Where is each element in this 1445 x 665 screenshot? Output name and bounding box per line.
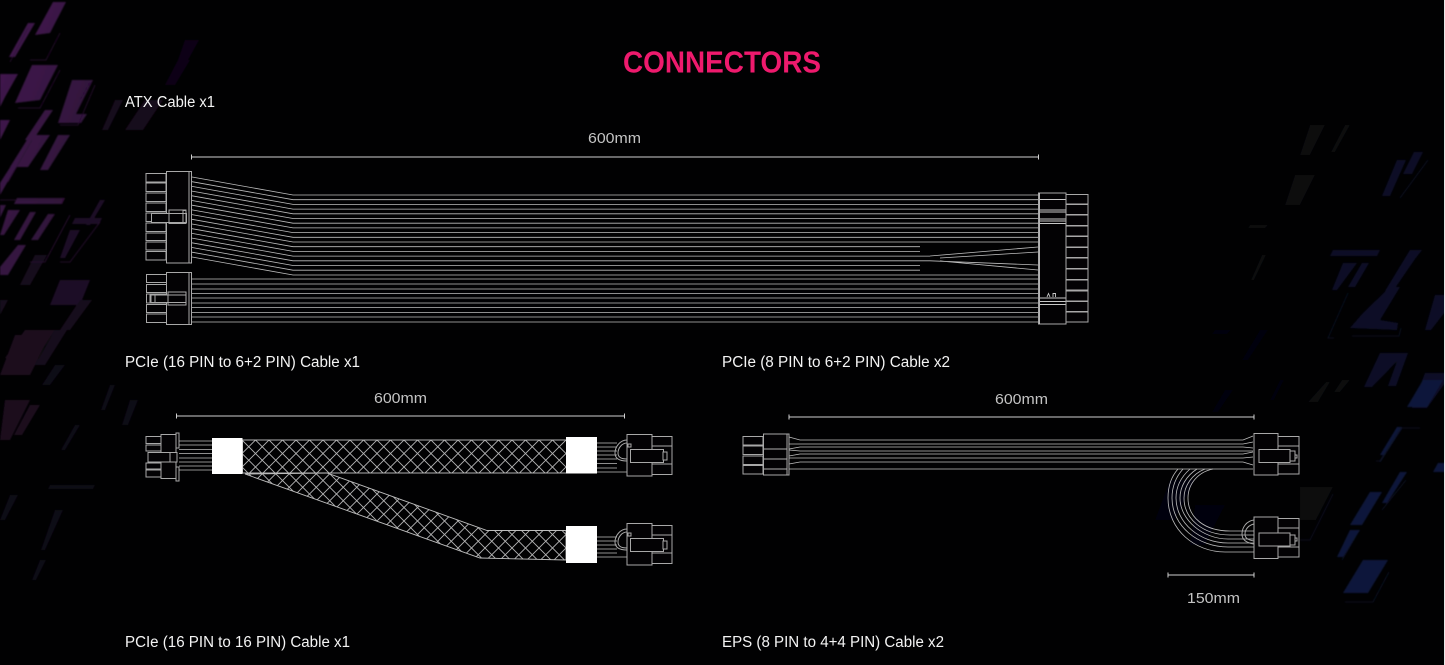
dimension: PCIe 600mm: 600mm (374, 391, 427, 407)
connector: EPS 8 pin left (743, 434, 789, 475)
dimension: PCIe 600mm (176, 391, 624, 418)
title: CONNECTORS (623, 44, 821, 80)
connector: EPS 8 pin upper right (1254, 434, 1299, 475)
sleeve cap: upper right (566, 437, 597, 474)
wires: left (179, 441, 212, 470)
connector: ATX 8 pin left (146, 272, 192, 324)
heading: PCIe 16 to 16 label: PCIe (16 PIN to 16 PIN) Cable x1 (125, 634, 350, 651)
ATX upper wires (192, 177, 1038, 275)
connector: 6+2 pin upper right (615, 434, 672, 476)
ATX lower wires (191, 279, 1038, 322)
dimension: 150mm (1168, 572, 1254, 607)
ATX cable diagram (146, 131, 1088, 324)
connector: 4+4 pin lower right (1242, 517, 1299, 558)
dimension: ATX 600mm: 600mm (588, 131, 641, 147)
dimension: EPS 600mm: 600mm (995, 392, 1048, 408)
wires: EPS curved branch (1168, 469, 1254, 552)
wires: EPS main (789, 436, 1253, 469)
heading: PCIe 16 to 6+2 label: PCIe (16 PIN to 6+2 PIN) Cable x1 (125, 354, 360, 371)
dimension: EPS 600mm (789, 392, 1254, 420)
lower braided sleeve (245, 473, 566, 560)
connector: ATX 24 pin right (1038, 193, 1088, 324)
wires: upper right (597, 443, 627, 472)
upper braided sleeve (242, 440, 566, 473)
connector: 16 pin left (146, 433, 179, 481)
PCIe braided Y cable diagram (146, 391, 672, 565)
decoration: blue streaks right (1155, 125, 1445, 602)
decoration: purple streaks left (0, 2, 199, 580)
sleeve cap: left (212, 438, 242, 474)
dimension: ATX 600mm (192, 131, 1038, 160)
heading: ATX cable label: ATX Cable x1 (125, 94, 215, 111)
connector: 6+2 pin lower right (615, 524, 672, 565)
heading: PCIe 8 to 6+2 label: PCIe (8 PIN to 6+2 PIN) Cable x2 (722, 354, 950, 371)
heading: EPS label: EPS (8 PIN to 4+4 PIN) Cable x2 (722, 634, 944, 651)
wires: lower right (597, 537, 627, 557)
EPS cable diagram (743, 392, 1299, 607)
sleeve cap: lower right (566, 526, 597, 563)
dimension: 150mm: 150mm (1187, 591, 1240, 607)
connector: ATX 24 pin left (146, 172, 192, 263)
